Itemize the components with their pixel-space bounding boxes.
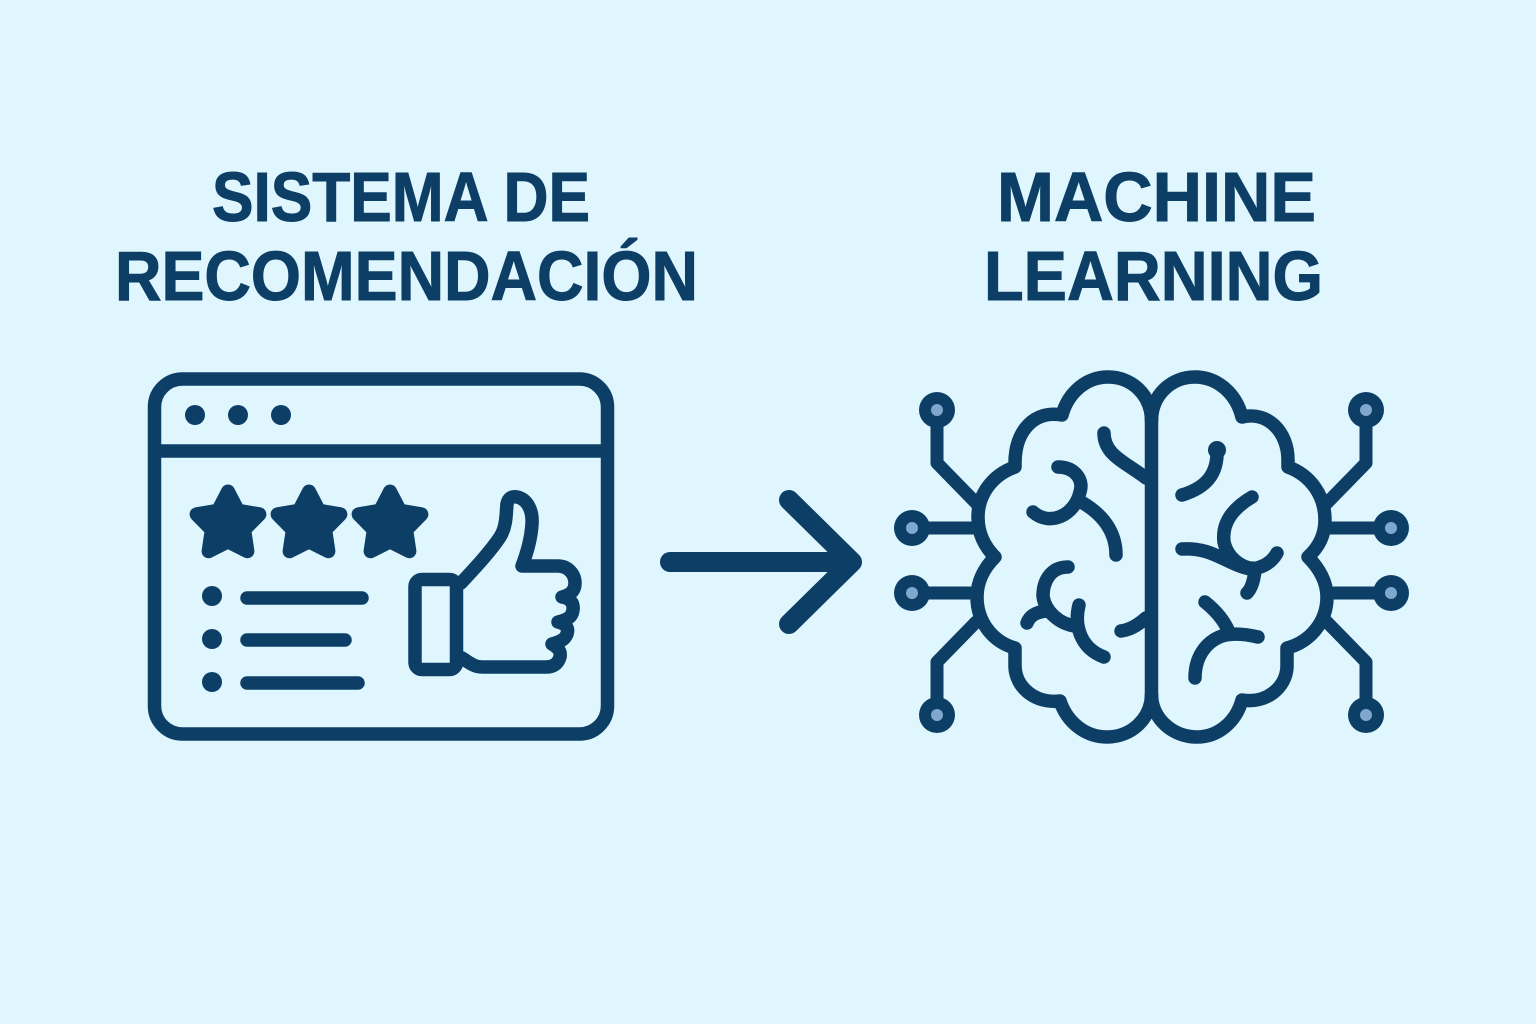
- icon: thumbs up: [415, 497, 575, 670]
- right hemisphere folds: [1182, 448, 1277, 678]
- circuit connectors: [912, 410, 1391, 715]
- arrow: [670, 500, 852, 624]
- icon: brain with circuit nodes: [894, 377, 1409, 737]
- three stars rating: [197, 492, 421, 551]
- heading: sistema de recomendación: RECOMENDACIÓN: [115, 237, 698, 315]
- heading: sistema de recomendación: [115, 158, 698, 315]
- heading: machine learning: MACHINE: [997, 158, 1316, 236]
- heading: machine learning: [984, 158, 1323, 315]
- list of items: [202, 586, 362, 692]
- window control dots: [185, 405, 291, 425]
- left hemisphere folds: [1027, 433, 1146, 657]
- window frame: [154, 379, 608, 734]
- heading: sistema de recomendación: SISTEMA DE: [212, 158, 590, 236]
- heading: machine learning: LEARNING: [984, 237, 1323, 315]
- brain outline: [977, 377, 1327, 737]
- circuit nodes: [894, 392, 1409, 733]
- icon: recommendation browser window: [154, 379, 608, 734]
